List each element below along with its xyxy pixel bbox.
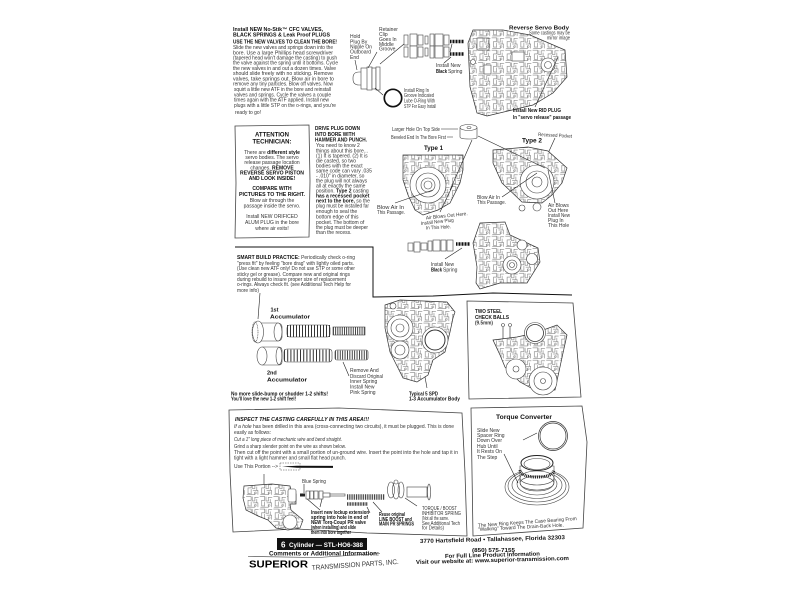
- label: slide new spacer ring: Down Over: [477, 438, 502, 444]
- heading: drive plug: INTO BORE WITH: [315, 132, 355, 138]
- diagram: valve body: [243, 484, 303, 530]
- label: retainer clip: [379, 27, 398, 52]
- label: hold plug: End: [350, 55, 359, 61]
- label: beveled end: Beveled End In The Bore First: [391, 135, 446, 141]
- label: discard inner spring: Pink Spring: [350, 390, 376, 396]
- icon: piston: [252, 321, 282, 343]
- label: torque boost spring: INHIBITOR SPRING: [422, 511, 461, 517]
- body text: clean the bore: Slide the new valves and springs down into the: [233, 45, 333, 51]
- panel: reverse servo body: [468, 26, 571, 121]
- footer: contact address: Visit our website at: www.superior-transmission.com: [416, 556, 569, 566]
- icon: valve: [408, 240, 453, 252]
- label: install RID plug: [513, 108, 571, 121]
- label: blow air: Blow Air In: [377, 205, 404, 211]
- diagram: type 2 servo body: [493, 147, 567, 211]
- body text: plug instructions: Grind a sharp slender point on the wire as shown below.: [234, 444, 346, 450]
- note: mirror image: Some castings may be: [529, 30, 570, 36]
- text block: smart build practice: sticky gel or grease). Compare new and original rings: [237, 272, 350, 278]
- heading: torque converter: Torque Converter: [496, 415, 553, 421]
- text: compare with pictures: PICTURES TO THE RIGHT.: [239, 192, 306, 198]
- arrow: black spring: [445, 248, 462, 259]
- label: lockup instruction: Insert new lockup extension: [311, 510, 369, 516]
- body text: plug notes: next to the bore, so the: [316, 199, 370, 205]
- body text: plug notes: pocket. The bottom of: [316, 220, 365, 226]
- text block: smart build practice: SMART BUILD PRACTICE: Periodically check o-ring: [237, 255, 355, 261]
- body text: plug notes: all at exactly the same: [316, 184, 366, 190]
- text block: smart build practice: during rebuild to insure proper size of replacement: [237, 277, 347, 283]
- brand: superior transmission parts: SUPERIOR: [249, 560, 309, 570]
- arrows: plug callouts: [355, 44, 404, 95]
- text: remove reverse servo piston: [240, 150, 304, 182]
- label: air blows out: Air Blows Out Here.: [426, 211, 468, 221]
- label: air blows out: [421, 211, 468, 231]
- icon: inner spring: [333, 327, 365, 335]
- brand: superior transmission parts: TRANSMISSION PARTS, INC.: [312, 559, 399, 572]
- label: retainer clip: Retainer: [379, 27, 398, 33]
- label: air blows out: [548, 203, 570, 229]
- body text: plug instructions: If a hole has been drilled in this area (cross-connecting two circuits), it must be plugged. This is done: [234, 424, 454, 430]
- label: bottom note: "Walking" Toward The Drain-Back Hole.: [478, 523, 564, 533]
- label: use this portion: Use This Portion -->: [234, 464, 278, 470]
- label: reuse springs: Reuse original: [379, 512, 405, 518]
- panel: 1-3 accumulator body: [385, 300, 460, 402]
- icon: spacer ring: [538, 422, 568, 450]
- label: air blows out: Install New: [548, 213, 570, 219]
- body text: plug instructions: [234, 424, 458, 462]
- callout: no more slide-bump: [231, 392, 328, 402]
- label: lockup instruction: spring into hole in end of: [311, 515, 368, 521]
- label: torque boost spring: (Not all the same.: [422, 516, 449, 522]
- badge: part number: [277, 538, 367, 550]
- heading: attention: [252, 132, 292, 146]
- label: air blows out: Install New Plug: [421, 218, 454, 227]
- badge: part number: 6: [281, 540, 286, 550]
- text block: smart build practice: [237, 255, 355, 294]
- body text: plug notes: You need to know 2: [316, 143, 360, 149]
- label: install new black spring: Spring: [443, 268, 458, 274]
- label: hold plug: Plug By: [350, 40, 368, 46]
- label: torque boost spring: See Additional Tech: [422, 521, 460, 527]
- label: discard inner spring: [350, 368, 383, 396]
- callout: no more slide-bump: No more slide-bump or shudder 1-2 shifts!: [231, 392, 328, 398]
- label: retainer clip: Groove: [379, 46, 396, 52]
- label: blue spring: Blue Spring: [302, 479, 326, 485]
- brand: superior transmission parts: [249, 559, 399, 572]
- diagram: plug orientation: [391, 124, 545, 190]
- panel: attention technician: [235, 125, 310, 238]
- body text: plug instructions: tight with a light hammer and small flat head punch.: [234, 456, 346, 462]
- text: install orificed plug: Install NEW ORIFICED: [246, 214, 298, 220]
- text: remove reverse servo piston: REVERSE SERVO PISTON: [240, 170, 304, 176]
- label: typical 5 spd: [409, 392, 460, 402]
- body text: plug notes: the plug must be deeper: [316, 225, 368, 231]
- arrows: blue spring and valve: [304, 484, 322, 510]
- heading: install valves: BLACK SPRINGS & Leak Proof PLUGS: [233, 32, 331, 38]
- text: comments: Comments or Additional Information:: [269, 552, 379, 558]
- icon: inhibitor springs: [388, 480, 404, 499]
- label: install new black spring: Install New: [436, 63, 461, 69]
- arrow: body: [425, 377, 427, 388]
- arrow: recessed pocket: [545, 138, 555, 160]
- text: install orificed plug: where air exits!: [255, 226, 289, 232]
- diagram: valves with black springs: [404, 34, 464, 75]
- panel: type 1 casting: [377, 145, 468, 231]
- label: slide new spacer ring: The Step: [477, 455, 498, 461]
- heading: attention: TECHNICIAN:: [252, 140, 292, 146]
- diagram: servo body: [493, 322, 567, 395]
- label: reuse springs: MAIN PR SPRINGS: [379, 522, 415, 528]
- badge: part number: Cylinder — STL-HO6-388: [289, 543, 364, 549]
- icon: inner spring: [335, 350, 368, 360]
- label: lockup instruction: NEW Torq-Coupl PR valve: [311, 520, 366, 526]
- label: install new black spring: Black: [431, 268, 442, 274]
- text block: smart build practice: "press fit" by feeling "bore drag" with lightly oiled parts.: [237, 261, 354, 267]
- label: install ring: Groove Indicated: [404, 93, 434, 99]
- footer: contact address: 3770 Hartsfield Road • Tallahassee, Florida 32303: [420, 535, 566, 545]
- label: check balls: [475, 309, 510, 326]
- label: 1st accumulator: Accumulator: [270, 314, 311, 320]
- heading: type 1: Type 1: [424, 145, 443, 152]
- body text: plug notes: - .010" in diameter, so: [316, 174, 365, 180]
- arrow: to step: [504, 454, 518, 483]
- arrows: type 1 callouts: [395, 185, 453, 212]
- label: reuse springs: LINE BOOST and: [379, 517, 412, 523]
- label: blow air: [477, 195, 506, 206]
- body text: plug notes: plug must be installed far: [316, 204, 369, 210]
- label: air blows out: Out Here: [548, 208, 569, 214]
- body text: plug instructions: Cut a 1" long piece of mechanic wire and bend straight.: [234, 437, 342, 443]
- label: blow air: This Passage.: [477, 200, 506, 206]
- icon: upper valve: [404, 34, 449, 46]
- label: 2nd accumulator: 2nd: [267, 370, 277, 376]
- icon: boost sleeve: [407, 484, 430, 500]
- text: remove reverse servo piston: servo bodies. The servo: [245, 155, 299, 161]
- heading: install valves: [233, 27, 331, 38]
- icon: orificed plug: [460, 124, 477, 139]
- label: install new black spring: Black: [436, 69, 447, 75]
- label: blow air: This Passage.: [377, 210, 405, 216]
- text: compare with pictures: Blow air through the: [250, 198, 294, 204]
- text: remove reverse servo piston: changes. REMOVE: [250, 166, 294, 172]
- heading: drive plug: DRIVE PLUG DOWN: [315, 126, 360, 132]
- arrows: type 2 callouts: [502, 170, 555, 203]
- label: discard inner spring: Discard Original: [350, 374, 383, 380]
- body text: clean the bore: should slide freely with no sticking. Remove: [233, 71, 333, 77]
- body text: clean the bore: bore. Use a large Phillips head screwdriver: [233, 50, 333, 56]
- label: install ring: Install Ring In: [404, 88, 429, 94]
- footer: contact address: [416, 535, 569, 566]
- label: install new black spring: [436, 63, 463, 75]
- text: compare with pictures: COMPARE WITH: [252, 186, 292, 192]
- label: slide new spacer ring: Slide New: [477, 428, 500, 434]
- label: discard inner spring: Inner Spring: [350, 379, 377, 385]
- icon: outer spring: [284, 349, 332, 362]
- panel: torque converter: [471, 406, 587, 536]
- label: hold plug: [350, 34, 372, 61]
- footer: contact address: (850) 575-7155: [472, 548, 516, 554]
- body text: clean the bore: the valve against the spring until it bottoms. Cycle: [233, 61, 338, 67]
- text: install orificed plug: ALUM PLUG in the bore: [245, 220, 299, 226]
- diagram: 2nd accumulator: [257, 347, 368, 384]
- body text: plug notes: bottom edge of this: [316, 215, 359, 221]
- rule: [248, 554, 380, 558]
- label: discard inner spring: Remove And: [350, 368, 379, 374]
- body text: plug instructions: easily as follows:: [234, 430, 271, 436]
- label: slide new spacer ring: [477, 428, 505, 461]
- arrow: to o-ring: [258, 293, 260, 319]
- text: remove reverse servo piston: AND LOOK INSIDE!: [249, 176, 296, 182]
- label: install new black spring: Spring: [448, 69, 463, 75]
- label: hold plug: Outboard: [350, 50, 371, 56]
- arrow: to ring: [523, 433, 537, 440]
- diagram: 1st accumulator: [252, 308, 365, 343]
- label: install RID plug: In "servo release" passage: [513, 115, 571, 121]
- body text: plug notes: has a recessed pocket: [316, 194, 370, 200]
- label: torque boost spring: [422, 506, 461, 532]
- panel: type 2 casting: [477, 132, 573, 229]
- label: install ring: [404, 88, 436, 110]
- heading: type 2: Type 2: [522, 138, 542, 144]
- body text: clean the bore: plugs with a little STP on the o-rings, and you're: [234, 103, 336, 109]
- body text: plug notes: enough to seal the: [316, 209, 357, 215]
- body text: plug notes: position. Type 2 casting: [316, 189, 369, 195]
- diagram: type 1 servo body: [403, 155, 463, 215]
- icon: lockup valve: [300, 491, 345, 499]
- text: remove reverse servo piston: release passage location: [244, 160, 300, 166]
- text block: smart build practice: (Use clean new ATF only! Do not use STP or some other: [237, 266, 355, 272]
- label: install ring: Lube O-Ring With: [404, 98, 435, 104]
- icon: steel balls: [502, 324, 512, 341]
- text block: smart build practice: more info): [237, 288, 259, 294]
- label: install RID plug: Install New RID PLUG: [513, 108, 561, 114]
- body text: plug notes: die casted, so two: [316, 158, 356, 164]
- arrow: torque spring: [405, 498, 417, 506]
- label: check balls: CHECK BALLS: [475, 315, 510, 321]
- body text: clean the bore: times again with the ATF applied. Install new: [234, 98, 329, 104]
- body text: clean the bore: remove any tiny particles. Blow off valves. Now: [233, 82, 333, 88]
- text: compare with pictures: passage inside the servo.: [244, 204, 300, 210]
- text block: smart build practice: o-rings. Always check fit. (see Additional Tech Help for: [237, 282, 351, 288]
- panel: two steel check balls: [467, 301, 581, 399]
- label: check balls: TWO STEEL: [475, 309, 502, 315]
- note: mirror image: mirror image: [547, 36, 570, 42]
- label: air blows out: Plug In: [548, 218, 564, 224]
- body text: plug notes: things about this bore...: [316, 148, 368, 154]
- label: lockup instruction: them into bore together: [311, 530, 351, 536]
- label: slide new spacer ring: Hub Until: [477, 444, 498, 450]
- diagram: accumulator body: [385, 300, 455, 382]
- label: recessed pocket: Recessed Pocket: [538, 132, 573, 140]
- label: 2nd accumulator: [267, 370, 308, 384]
- body text: plug notes: bodies with the exact: [316, 164, 363, 170]
- label: lockup instruction: [311, 510, 369, 536]
- label: larger hole: Larger Hole On Top Side: [392, 127, 440, 133]
- body text: clean the bore: (tapered head won't damage the casting) to push: [233, 56, 337, 62]
- body text: plug notes: same code can vary .035: [316, 168, 372, 174]
- label: typical 5 spd: Typical 5 SPD: [409, 392, 438, 398]
- heading: drive plug: HAMMER AND PUNCH.: [315, 138, 368, 144]
- divider: smart build outline: [235, 247, 572, 297]
- arrow: to casting: [263, 474, 265, 484]
- label: air blows out: In This Hole.: [426, 224, 451, 231]
- arrow: to plug: [535, 57, 558, 107]
- arrows: plug labels: [441, 129, 458, 137]
- arrows: line boost: [367, 502, 382, 513]
- body text: clean the bore: valves and springs. Cycle the valves a couple: [234, 92, 331, 98]
- label: typical 5 spd: 1-3 Accumulator Body: [409, 396, 460, 402]
- body text: clean the bore: the new valves in and out a dozen times. Valve: [233, 66, 336, 72]
- label: blow air: Blow Air In: [477, 195, 500, 201]
- label: 1st accumulator: [270, 308, 311, 320]
- label: check balls: (9.5mm): [475, 320, 493, 326]
- icon: o-ring: [384, 89, 402, 107]
- diagram: servo body: [473, 222, 540, 289]
- heading: inspect the casting: INSPECT THE CASTING CAREFULLY IN THIS AREA!!!: [235, 417, 369, 423]
- label: slide new spacer ring: Spacer Ring: [477, 433, 505, 439]
- icon: wire portion: [280, 463, 333, 470]
- label: install new black spring: Install New: [431, 262, 454, 268]
- body text: plug notes: than the recess.: [316, 230, 352, 236]
- footer: part number and branding: [248, 538, 399, 572]
- body text: clean the bore: squirt a little new ATF in the bore and reinstall: [234, 87, 331, 93]
- body text: clean the bore: USE THE NEW VALVES TO CLEAN THE BORE!: [233, 40, 337, 46]
- label: blow air: [377, 205, 405, 216]
- text block: install valves instructions: [233, 27, 338, 116]
- body text: clean the bore: [233, 40, 338, 116]
- label: reuse springs: [379, 512, 415, 528]
- body text: plug instructions: Then cut off the point with a small portion of un-ground wire. Insert the point into the hole and tap it in: [234, 450, 458, 456]
- label: install ring: STP For Easy Install: [404, 104, 436, 110]
- body text: plug notes: the plug will not always: [316, 178, 368, 184]
- arrows: to black springs: [444, 44, 452, 63]
- label: install new black spring: [431, 262, 458, 274]
- label: torque boost spring: TORQUE / BOOST: [422, 506, 457, 512]
- footer: contact address: For Full Line Product Information: [445, 552, 540, 560]
- heading: drive plug: [315, 126, 368, 144]
- callout: no more slide-bump: You'll love the new 1-2 shift feel!: [231, 396, 296, 402]
- icon: piston: [257, 347, 282, 365]
- label: lockup instruction: (when installing) and slide: [311, 525, 356, 531]
- label: torque boost spring: for Details): [422, 526, 444, 532]
- body text: plug notes: [316, 143, 372, 236]
- heading: install valves: Install NEW No-Stik™ CFC VALVES,: [233, 27, 324, 33]
- label: bottom note: The New Ring Keeps The Case Bearing From: [478, 516, 577, 529]
- label: retainer clip: Goes In: [379, 37, 397, 43]
- label: retainer clip: Clip: [379, 32, 388, 38]
- heading: attention: ATTENTION: [255, 132, 289, 138]
- label: hold plug: Nipple On: [350, 44, 372, 50]
- diagram: valve body outline: [468, 30, 567, 116]
- label: 1st accumulator: 1st: [270, 308, 279, 314]
- panel: inspect the casting: [229, 408, 467, 536]
- icon: line boost springs: [347, 497, 385, 504]
- label: slide new spacer ring: It Rests On: [477, 449, 502, 455]
- icon: black spring: [456, 242, 470, 246]
- body text: plug notes: (1) It is tapered. (2) It is: [316, 154, 368, 160]
- icon: black springs: [450, 42, 464, 54]
- label: hold plug: Hold: [350, 34, 361, 40]
- arrows: plug to castings: [450, 136, 545, 190]
- note: mirror image: [529, 30, 570, 42]
- diagram: converter hub: [505, 456, 569, 505]
- icon: outer spring: [287, 325, 330, 337]
- label: air blows out: Air Blows: [548, 203, 569, 209]
- label: 2nd accumulator: Accumulator: [267, 378, 308, 384]
- icon: lower valve: [404, 46, 449, 58]
- diagram: hold plug and o-ring: [350, 27, 436, 110]
- heading: reverse servo body: Reverse Servo Body: [509, 26, 570, 32]
- arrow: to inner spring: [343, 362, 349, 376]
- diagram: valve with black spring and body: [408, 222, 540, 289]
- text: compare with pictures: [239, 186, 306, 210]
- body text: clean the bore: ready to go!: [235, 110, 261, 116]
- text block: drive plug down: [315, 126, 372, 236]
- body text: clean the bore: valves, take springs out. Blow air in bore to: [233, 76, 334, 82]
- icon: hold plug: [353, 67, 380, 90]
- label: discard inner spring: Install New: [350, 384, 375, 390]
- text: remove reverse servo piston: There are different style: [244, 150, 300, 156]
- text: install orificed plug: [245, 214, 299, 232]
- label: retainer clip: Middle: [379, 42, 394, 48]
- label: air blows out: This Hole: [548, 223, 569, 229]
